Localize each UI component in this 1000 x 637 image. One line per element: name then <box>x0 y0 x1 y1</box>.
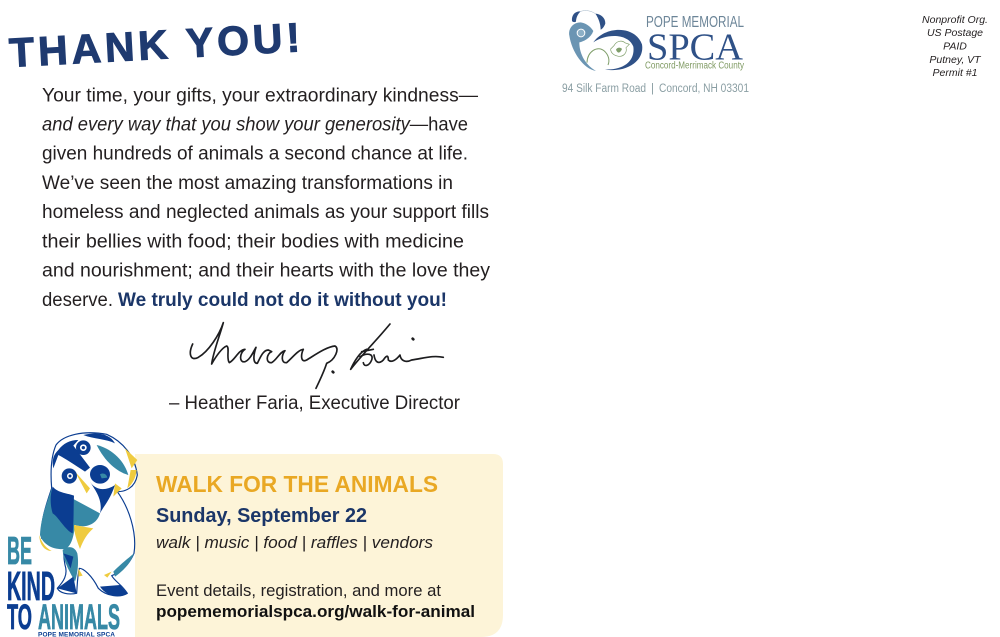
illustration: dog and be kind to animals <box>7 433 137 637</box>
be kind to animals lettering: KIND <box>7 563 55 609</box>
logo wordmark SPCA: SPCA <box>647 26 744 68</box>
event date: Sunday, September 22 <box>156 505 367 527</box>
return address: Concord, NH 03301 <box>659 83 749 95</box>
letter body text <box>42 86 491 311</box>
postage indicia: US Postage <box>927 27 983 39</box>
letter body text: Your time, your gifts, your extraordinary kindness— <box>42 86 478 106</box>
event heading: WALK FOR THE ANIMALS <box>156 471 438 497</box>
letter body text: We’ve seen the most amazing transformations in <box>42 173 453 194</box>
be kind to animals lettering: BE <box>7 530 32 573</box>
postage indicia: Putney, VT <box>929 54 982 66</box>
panel: walk for the animals <box>135 454 503 637</box>
letter body text: homeless and neglected animals as your support fills <box>42 202 489 223</box>
return address: | <box>651 83 654 95</box>
event activities: walk | music | food | raffles | vendors <box>156 533 433 552</box>
icon: dog <box>39 433 137 596</box>
icon: pet silhouettes <box>569 11 642 71</box>
postage indicia: PAID <box>943 40 967 52</box>
be kind to animals lettering: TO <box>7 598 32 637</box>
letter body text: We truly could not do it without you! <box>118 290 447 311</box>
letter body text: deserve. <box>42 290 113 311</box>
signature <box>190 323 443 388</box>
logo: Pope Memorial SPCA <box>569 11 744 72</box>
return address: 94 Silk Farm Road <box>562 83 646 95</box>
letter body text: and nourishment; and their hearts with the love they <box>42 260 491 282</box>
postage indicia: Nonprofit Org. <box>922 14 988 26</box>
letter body text: given hundreds of animals a second chance at life. <box>42 144 468 164</box>
event details: Event details, registration, and more at <box>156 581 441 600</box>
be kind to animals lettering: ANIMALS <box>38 598 120 637</box>
postage indicia <box>922 14 988 79</box>
postage indicia: Permit #1 <box>933 67 977 79</box>
return address <box>562 83 749 95</box>
logo wordmark county: Concord-Merrimack County <box>645 60 744 72</box>
title: Thank You: THANK YOU! <box>8 14 301 76</box>
event url: popememorialspca.org/walk-for-animal <box>156 602 475 621</box>
letter body text: their bellies with food; their bodies with medicine <box>42 232 464 252</box>
be kind to animals lettering <box>7 530 120 637</box>
signature name: – Heather Faria, Executive Director <box>169 393 461 414</box>
logo wordmark top line: POPE MEMORIAL <box>646 14 744 31</box>
letter body text: and every way that you show your generosity—have <box>42 114 468 136</box>
